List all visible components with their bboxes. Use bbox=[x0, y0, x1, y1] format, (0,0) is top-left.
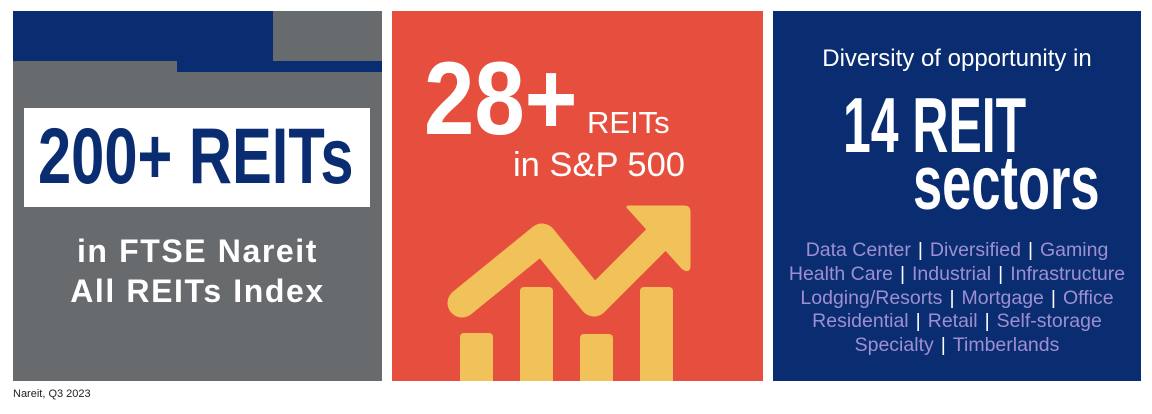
sector list: Specialty | Timberlands bbox=[855, 334, 1059, 356]
sector list bbox=[789, 239, 1125, 356]
intro text: Diversity of opportunity in bbox=[822, 45, 1092, 72]
decorative navy block bbox=[13, 11, 273, 61]
sector list: Lodging/Resorts | Mortgage | Office bbox=[800, 287, 1114, 309]
decorative navy bar bbox=[177, 61, 382, 72]
headline box: 200+ REITs: 200+ REITs bbox=[38, 111, 354, 200]
sector list: Data Center | Diversified | Gaming bbox=[806, 239, 1108, 261]
subtitle text bbox=[70, 233, 325, 309]
headline: 28+: 28+ bbox=[424, 41, 577, 157]
sector list: Health Care | Industrial | Infrastructure bbox=[789, 263, 1125, 285]
panel: right navy bbox=[773, 11, 1141, 381]
headline: 14 REIT sectors bbox=[843, 81, 1100, 226]
footer source: Nareit, Q3 2023 bbox=[13, 388, 91, 400]
headline: 14 REIT sectors: 14 REIT bbox=[843, 81, 1026, 169]
sector list: Residential | Retail | Self-storage bbox=[812, 310, 1102, 332]
subtitle text: All REITs Index bbox=[70, 273, 325, 309]
text: REITs: REITs bbox=[587, 105, 670, 140]
chart icon: growth bars and arrow bbox=[448, 206, 690, 381]
headline: 14 REIT sectors: sectors bbox=[913, 141, 1100, 226]
text: in S&P 500: in S&P 500 bbox=[513, 146, 685, 184]
panel: left gray bbox=[13, 11, 382, 381]
subtitle text: in FTSE Nareit bbox=[77, 233, 318, 269]
panel: middle red bbox=[392, 11, 763, 381]
